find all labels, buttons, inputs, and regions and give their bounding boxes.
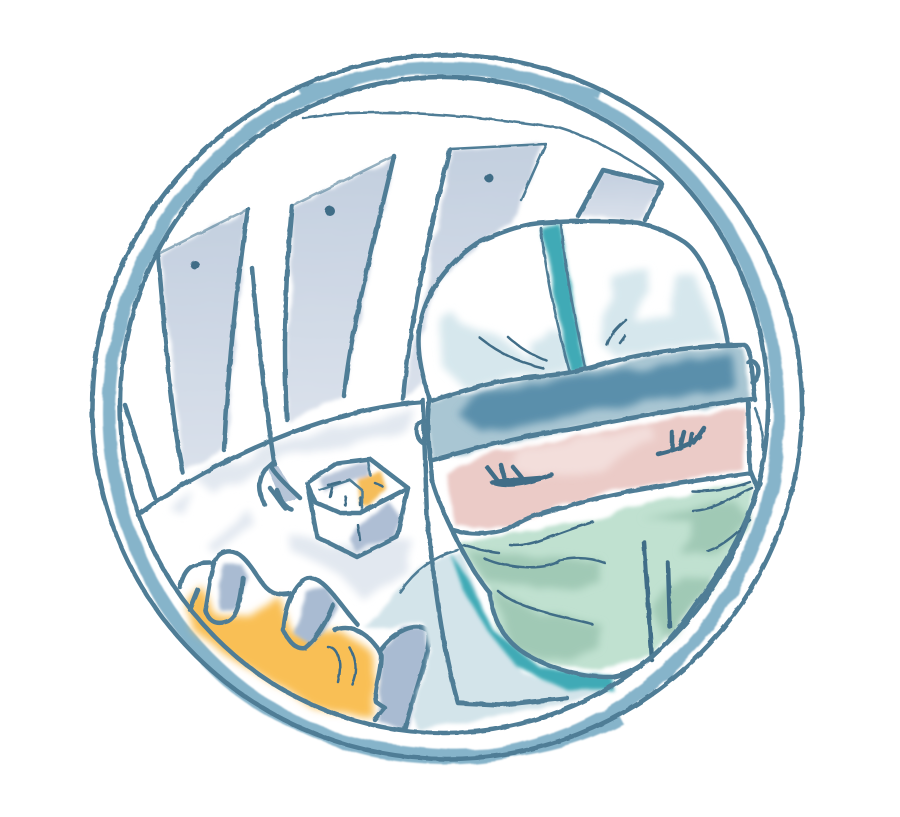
face: pink skin band [445,405,743,527]
hand with orange glove [180,551,429,730]
wall panels with rivets [158,113,662,473]
head: hood shadows [437,267,727,390]
container with food [307,459,408,557]
fork on pole [252,268,300,510]
goggles: blue band [427,347,750,460]
blue watercolor ring band [109,68,779,758]
eyelashes [487,428,704,485]
table with shadows and edge line [125,402,423,600]
porthole ring outlines [92,55,802,759]
teal strap on hood and collar [450,224,613,690]
head, goggle and mask outlines [416,221,763,677]
protective suit [363,400,610,730]
surgical mask: green [457,483,753,670]
